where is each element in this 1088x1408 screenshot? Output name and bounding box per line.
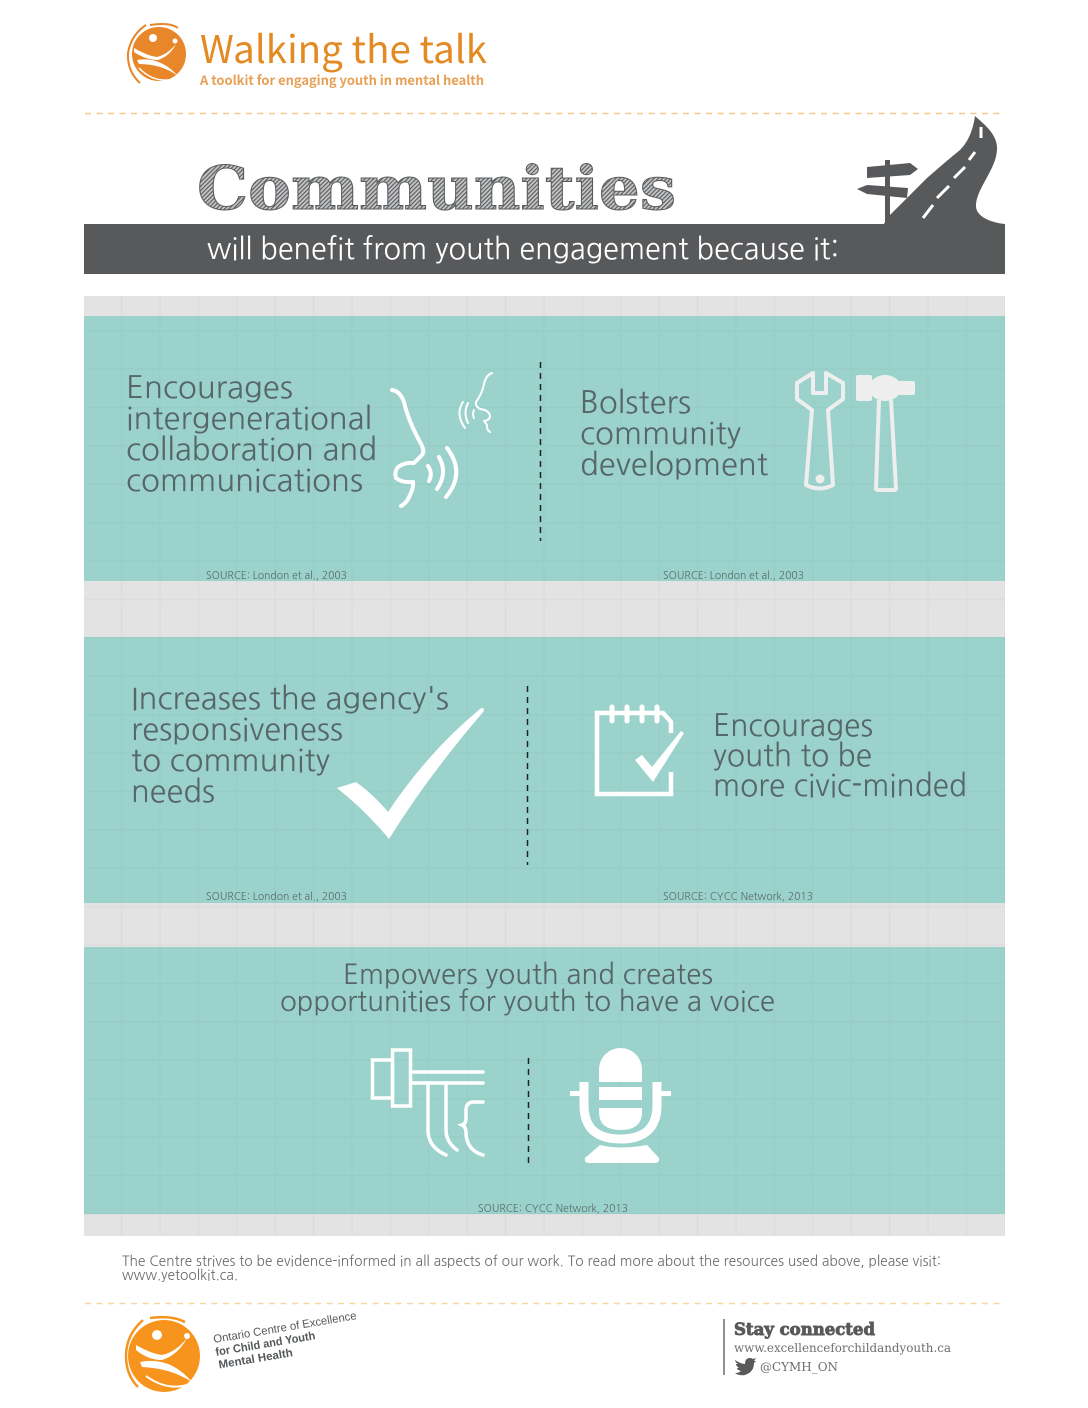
icon: microphone: [570, 1048, 671, 1163]
twitter handle: @CYMH_ON: [760, 1360, 838, 1374]
logo: Walking the talk emblem: [128, 24, 186, 83]
footer note: [122, 1254, 941, 1283]
icon: twitter bird: [735, 1358, 756, 1375]
text: intergenerational collaboration: communications: [126, 465, 363, 496]
text: agency responsiveness: Increases the agency's: [131, 683, 449, 714]
text: bolsters community development: development: [580, 449, 769, 480]
text: empowers youth: opportunities for youth to have a voice: [280, 988, 775, 1016]
organization name: for Child and Youth: [215, 1330, 316, 1359]
text: empowers youth: Empowers youth and creates: [343, 961, 713, 989]
source note: SOURCE: CYCC Network, 2013: [478, 1203, 628, 1214]
panel: row two: [84, 637, 1005, 903]
icon: hammer: [856, 375, 915, 490]
source note: SOURCE: CYCC Network, 2013: [663, 891, 813, 902]
icon: large check mark: [337, 708, 484, 839]
text: bolsters community development: community: [580, 418, 741, 449]
icon: speaker with sound lines: [372, 1050, 483, 1155]
text: civic-minded youth: more civic-minded: [713, 770, 967, 801]
text: intergenerational collaboration: Encourages: [126, 372, 293, 403]
footer note: www.yetoolkit.ca.: [122, 1268, 238, 1283]
source note: SOURCE: London et al., 2003: [663, 570, 804, 581]
text: civic-minded youth: Encourages: [713, 710, 873, 741]
brand tagline: A toolkit for engaging youth in mental health: [199, 70, 484, 89]
organization name: Ontario Centre of Excellence: [213, 1310, 358, 1346]
text: intergenerational collaboration: collaboration and: [126, 434, 377, 465]
icon: speaking and listening faces: [392, 373, 492, 506]
icon: wrench: [797, 373, 843, 488]
panel: row three: [84, 947, 1005, 1214]
organization name: Mental Health: [218, 1347, 294, 1371]
website: www.excellenceforchildandyouth.ca: [734, 1341, 951, 1355]
logo: Ontario Centre emblem: [126, 1317, 200, 1392]
subheading banner: [84, 224, 1005, 274]
main heading: Communities: Communities: [197, 154, 676, 224]
icon: winding road with signpost: [857, 116, 1005, 226]
source note: SOURCE: London et al., 2003: [206, 891, 347, 902]
text: intergenerational collaboration: [126, 372, 377, 496]
text: bolsters community development: [580, 387, 769, 480]
text: agency responsiveness: to community: [131, 745, 330, 776]
organization name: [213, 1310, 362, 1372]
subheading banner: will benefit from youth engagement because it:: [207, 234, 839, 264]
panel: row one: [84, 316, 1005, 581]
panel background: tiled grey strip: [84, 296, 1005, 1236]
text: agency responsiveness: needs: [131, 776, 215, 807]
text: empowers youth: [280, 961, 775, 1016]
text: civic-minded youth: youth to be: [713, 740, 872, 771]
text: civic-minded youth: [713, 710, 967, 801]
stay connected heading: Stay connected: [734, 1320, 875, 1340]
text: intergenerational collaboration: intergenerational: [126, 403, 372, 434]
text: agency responsiveness: [131, 683, 449, 807]
source note: SOURCE: London et al., 2003: [206, 570, 347, 581]
brand title: Walking the talk: Walking the talk: [200, 19, 487, 74]
footer note: The Centre strives to be evidence-informed in all aspects of our work. To read more about the resources used above, please visit:: [122, 1254, 941, 1269]
icon: notepad with check: [597, 707, 684, 794]
text: bolsters community development: Bolsters: [580, 387, 691, 418]
text: agency responsiveness: responsiveness: [131, 714, 343, 745]
